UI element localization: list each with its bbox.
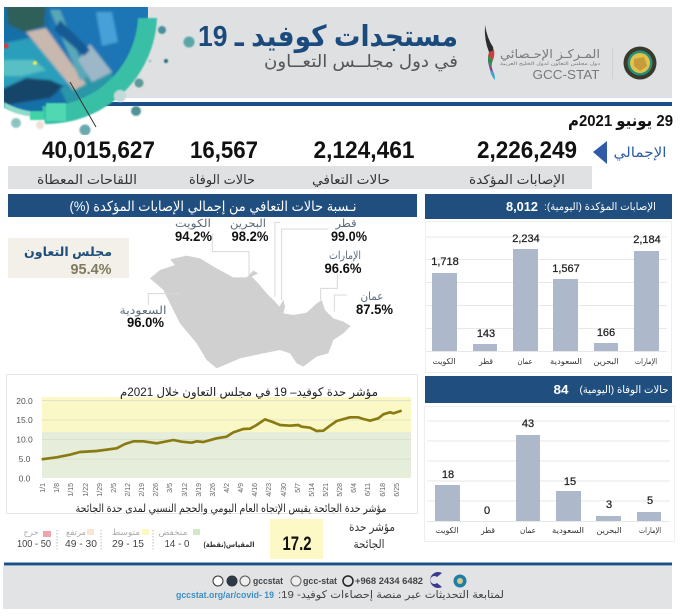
date: 29 يونيو 2021م [568, 113, 673, 130]
y axis labels: 5.0 [19, 454, 31, 464]
bar chart: daily deaths: قطر [480, 526, 495, 535]
stat label bar: حالات الوفاة [189, 172, 255, 188]
contact handles: +968 2434 6482 [355, 576, 423, 587]
bar chart: daily deaths [424, 406, 674, 542]
chart title: مؤشر حدة كوفيد– 19 في مجلس التعاون خلال 2021م [120, 385, 378, 400]
bar chart: daily deaths: البحرين [596, 526, 622, 535]
x axis dates: 6/25 [394, 483, 401, 497]
map label: UAE: 96.6% [324, 261, 362, 276]
contact handles: gcc-stat [303, 576, 338, 587]
severity index value: 17.2 [282, 534, 312, 555]
GCC-STAT logo: GCC-STAT [532, 67, 600, 82]
callout: GCC total [8, 238, 129, 278]
stat: deaths: 16,567 [190, 137, 258, 164]
trend line [42, 411, 402, 459]
x axis dates: 3/19 [196, 483, 203, 497]
map label: Bahrain: 98.2% [232, 229, 268, 244]
floating drops [149, 26, 194, 63]
x axis dates: 2/19 [139, 483, 146, 497]
x axis dates: 5/21 [323, 483, 330, 497]
bar chart: daily cases: الكويت [432, 357, 456, 366]
x axis dates: 3/5 [167, 483, 174, 493]
map label: Oman: 87.5% [356, 302, 393, 317]
panel: daily cases heading: 8,012 [506, 200, 538, 214]
bar chart: daily cases: البحرين [594, 357, 618, 366]
panel: daily deaths heading [425, 376, 672, 403]
severity scale legend [17, 527, 254, 550]
footer note: لمتابعة التحديثات عبر منصة إحصاءات كوفيد- 19: [278, 589, 504, 601]
panel: recovery rate heading [8, 194, 417, 217]
severity scale legend: 49 - 30 [65, 538, 97, 550]
social icons [213, 576, 353, 586]
bar chart: daily deaths: 18 [442, 469, 454, 481]
callout: GCC total: مجلس التعاون [24, 245, 112, 259]
map label: Kuwait: الكويت [175, 218, 211, 230]
x axis dates: 2/5 [111, 483, 118, 493]
y axis labels [16, 396, 33, 484]
stat label bar: الإصابات المؤكدة [469, 172, 565, 188]
map label: UAE: الإمارات [329, 250, 361, 262]
bar chart: daily cases: 143 [477, 328, 495, 340]
footer [3, 562, 672, 609]
x axis dates: 5/14 [309, 483, 316, 497]
label: total: الإجمالي [614, 144, 666, 161]
stat label bar [8, 166, 592, 189]
title: مستجدات كوفيد ـ 19 [198, 21, 458, 53]
arrow [593, 141, 607, 164]
severity scale legend: المقياس(نقطة) [204, 540, 254, 549]
map label: Oman: عمان [360, 291, 384, 303]
y axis labels: 15.0 [16, 415, 33, 425]
bar chart: daily cases: عمان [518, 357, 532, 366]
bar chart: daily deaths: 0 [484, 505, 490, 517]
map label: Oman [356, 291, 393, 317]
x axis dates: 1/1 [40, 483, 47, 493]
bar chart: daily deaths: السعودية [552, 526, 584, 535]
map label: Qatar: 99.0% [331, 229, 367, 244]
header illustration: vaccine circle [0, 4, 164, 136]
severity scale legend: 29 - 15 [112, 538, 144, 550]
y axis labels: 0.0 [19, 474, 31, 484]
contact handles: gccstat [253, 576, 284, 587]
stat: recovered: 2,124,461 [314, 137, 414, 164]
x axis dates: 1/15 [68, 483, 75, 497]
contact handles [253, 576, 423, 587]
panel: severity line chart [6, 374, 418, 515]
ribbon [485, 25, 494, 53]
bar chart: daily deaths: الإمارات [639, 526, 661, 536]
severity scale legend: مرتفع [66, 527, 86, 537]
website link: gccstat.org/ar/covid- 19 [176, 590, 274, 600]
severity scale legend: 100 - 50 [17, 538, 51, 550]
panel: recovery rate heading: نـسبة حالات التعافي من إجمالي الإصابات المؤكدة (%) [70, 198, 356, 215]
y axis labels: 20.0 [16, 396, 33, 406]
panel: daily cases heading [425, 194, 672, 219]
x axis dates: 5/7 [295, 483, 302, 493]
GCC-STAT logo [485, 25, 656, 82]
x axis dates: 3/12 [182, 483, 189, 497]
bar chart: daily cases: السعودية [550, 357, 582, 366]
x axis dates: 1/22 [83, 483, 90, 497]
x axis dates: 4/2 [224, 483, 231, 493]
panel: daily cases heading: الإصابات المؤكدة (اليومية): [544, 201, 656, 213]
callout: GCC total: 95.4% [70, 261, 112, 278]
map label: Bahrain: البحرين [230, 218, 266, 230]
map label: Saudi: 96.0% [127, 315, 164, 330]
stat: confirmed: 2,226,249 [477, 137, 577, 164]
severity scale legend: حرج [24, 527, 38, 537]
stat: vaccines: 40,015,627 [42, 137, 155, 164]
subtitle: في دول مجلــس التعــاون [264, 52, 458, 72]
bar chart: daily cases: قطر [478, 357, 493, 366]
GCC-STAT logo: دول مجلس التعاون لدول الخليج العربية [500, 61, 600, 66]
panel: daily deaths heading: حالات الوفاة (اليومية) [580, 384, 668, 396]
bar chart: daily cases: 166 [597, 327, 615, 339]
bar chart: daily cases: 1,718 [431, 256, 459, 268]
x axis dates: 2/26 [153, 483, 160, 497]
map of GCC with leader lines [148, 222, 351, 368]
x axis dates: 5/28 [337, 483, 344, 497]
total row [42, 137, 666, 164]
stat label bar: حالات التعافي [312, 172, 390, 187]
bar chart: daily cases: 2,234 [512, 233, 540, 245]
panel: daily deaths heading: 84 [554, 383, 569, 397]
bar chart: daily cases: 2,184 [633, 234, 661, 246]
header band [4, 7, 672, 106]
chart footnote: مؤشر حدة الجائحة يقيس الإتجاه العام اليومي والحجم النسبي لمدى حدة الجائحة [76, 503, 387, 515]
x axis dates [40, 483, 401, 497]
x axis dates: 3/26 [210, 483, 217, 497]
map label: Saudi: السعودية [120, 305, 166, 317]
severity index value: مؤشر حدة [349, 520, 395, 535]
map label: Kuwait: 94.2% [175, 229, 212, 244]
bar chart: daily deaths: 3 [606, 499, 612, 511]
map label: Kuwait [175, 218, 212, 244]
stat label bar: اللقاحات المعطاة [37, 172, 137, 187]
GCC-STAT logo: المـركـز الإحـصائي [500, 47, 600, 62]
severity scale legend: متوسط [112, 527, 140, 537]
bar chart: daily cases: 1,567 [552, 263, 580, 275]
bar chart: daily cases [426, 222, 672, 372]
bar chart: daily deaths: 43 [522, 418, 534, 430]
x axis dates: 4/9 [238, 483, 245, 493]
x axis dates: 6/4 [351, 483, 358, 493]
x axis dates: 2/12 [125, 483, 132, 497]
map label: Saudi [120, 305, 166, 330]
bar chart: daily deaths: 15 [564, 476, 576, 488]
severity bands [42, 397, 411, 478]
teal ring [4, 18, 157, 136]
x axis dates: 1/8 [54, 483, 61, 493]
x axis dates: 4/23 [266, 483, 273, 497]
bar chart: daily deaths: الكويت [436, 526, 458, 535]
map label: UAE [324, 250, 362, 276]
bar chart: daily cases: الإمارات [635, 357, 657, 367]
severity scale legend: منخفض [158, 527, 188, 537]
bar chart: daily deaths: 5 [647, 495, 653, 507]
footer logos [430, 572, 466, 588]
map label: Qatar: قطر [334, 218, 356, 230]
x axis dates: 4/30 [281, 483, 288, 497]
x axis dates: 4/16 [252, 483, 259, 497]
x axis dates: 6/18 [380, 483, 387, 497]
x axis dates: 6/11 [365, 483, 372, 496]
severity scale legend: 14 - 0 [164, 538, 190, 550]
y axis labels: 10.0 [16, 434, 33, 444]
severity index value [270, 519, 395, 559]
severity index value: الجائحة [354, 537, 384, 551]
x axis dates: 1/29 [97, 483, 104, 497]
map label: Qatar [331, 218, 367, 244]
bar chart: daily deaths: عمان [520, 526, 536, 535]
map label: Bahrain [230, 218, 268, 244]
